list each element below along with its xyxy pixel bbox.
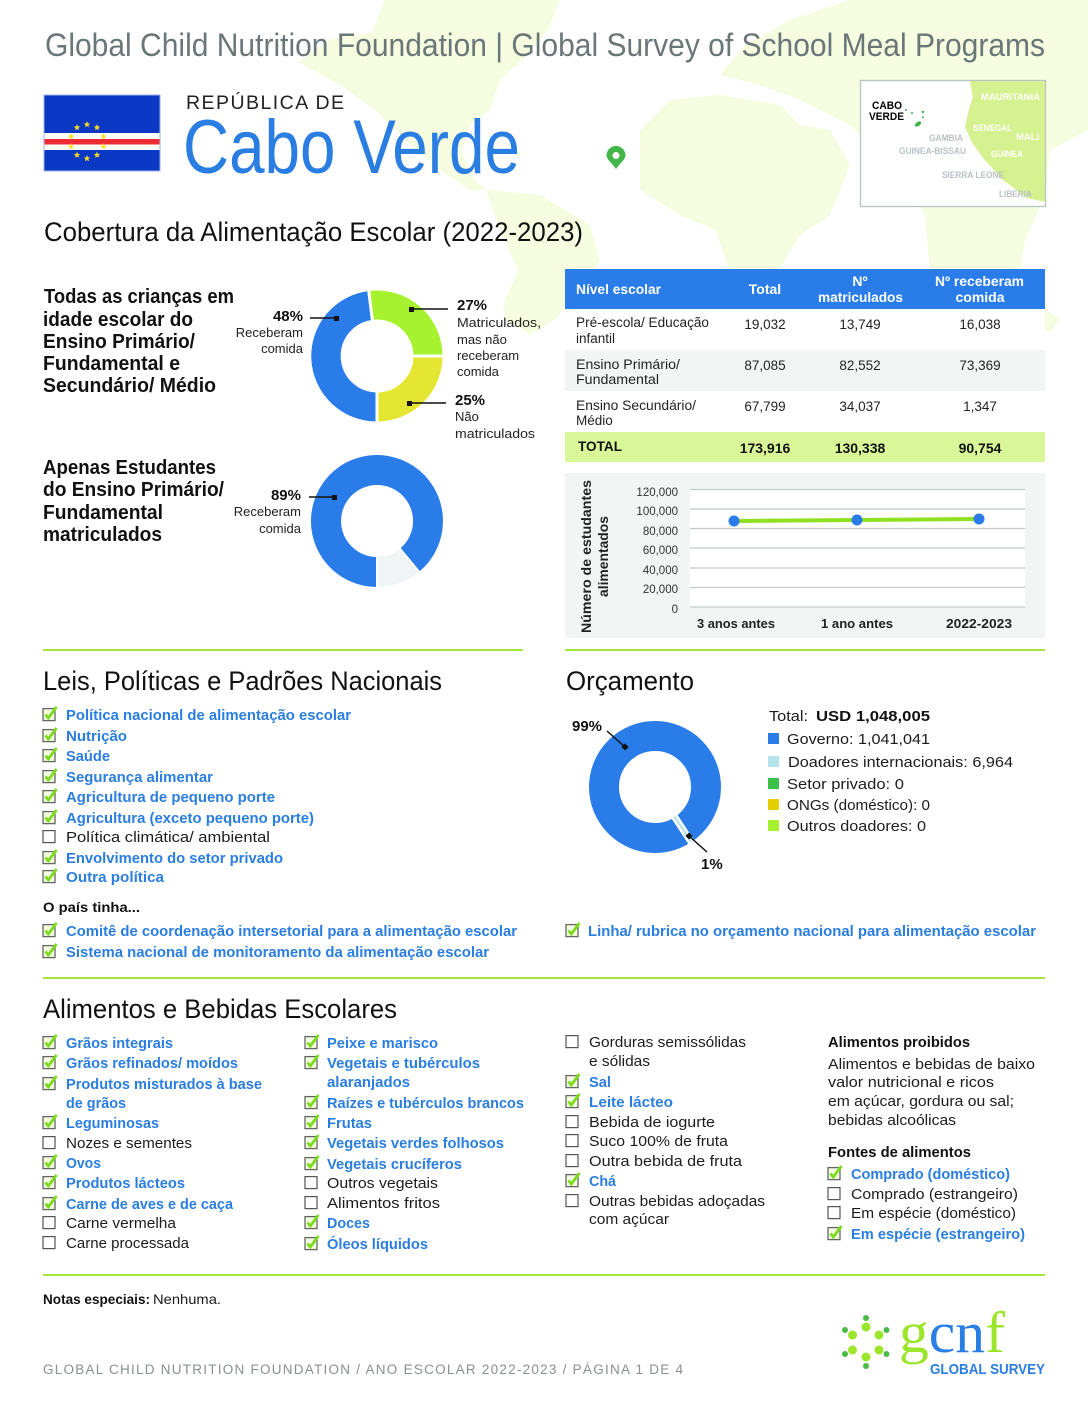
table header: Nível escolar — [576, 281, 662, 297]
item: climate policy: Política climática/ ambiental — [66, 830, 270, 846]
inset map: VERDE — [869, 111, 904, 123]
item: Peixe e marisco — [327, 1036, 438, 1052]
item: Vegetais e tubérculos — [327, 1056, 480, 1072]
callout: 89% received food — [234, 487, 337, 536]
legend: other donors: Outros doadores: 0 — [787, 818, 926, 835]
item: com açúcar — [589, 1212, 669, 1228]
item: nutrition — [43, 728, 127, 745]
item: Sal — [589, 1075, 611, 1091]
donut chart: all children — [310, 289, 444, 423]
item: health — [43, 748, 110, 765]
row: secondary: Médio — [576, 413, 613, 428]
legend: private sector: Setor privado: 0 — [787, 776, 904, 793]
footer: GLOBAL CHILD NUTRITION FOUNDATION / ANO ESCOLAR 2022-2023 / PÁGINA 1 DE 4 — [43, 1362, 683, 1377]
callout: 89% received food: Receberam — [234, 504, 301, 519]
line chart: students fed: 60,000 — [643, 545, 678, 557]
item: de grãos — [66, 1096, 126, 1112]
inset map: SIERRA LEONE — [942, 170, 1004, 180]
checklist: foods column 3 — [566, 1035, 765, 1228]
item: Gorduras semissólidas — [589, 1035, 746, 1051]
inset map: GAMBIA — [929, 133, 963, 143]
item: Comprado (doméstico) — [851, 1167, 1010, 1183]
logo: gcnf global survey: GLOBAL SURVEY — [930, 1361, 1045, 1378]
legend: budget sources — [768, 731, 1013, 835]
item: coordination committee: Comitê de coordenação intersetorial para a alimentação escolar — [66, 924, 517, 940]
item: Outra bebida de fruta — [589, 1154, 743, 1170]
row: preschool: Pré-escola/ Educação — [576, 315, 709, 330]
logo: gcnf global survey: gcnf — [899, 1300, 1006, 1365]
item: Carne processada — [66, 1236, 190, 1252]
budget total — [769, 708, 930, 725]
callout: 89% received food: 89% — [271, 487, 301, 504]
row: primary: 73,369 — [959, 358, 1001, 373]
item: Óleos líquidos — [327, 1235, 428, 1253]
callout: 27% enrolled not fed — [409, 297, 541, 379]
row: preschool: infantil — [576, 331, 615, 346]
item: Ovos — [66, 1156, 101, 1172]
heading: enrolled primary students only — [43, 457, 224, 546]
line chart: students fed: 120,000 — [636, 487, 678, 499]
callout: 25% not enrolled: Não — [455, 409, 479, 424]
page title: Global Child Nutrition Foundation | Global Survey of School Meal Programs — [45, 27, 1045, 63]
item — [566, 1194, 765, 1228]
heading: all school-age children: idade escolar do — [43, 309, 193, 331]
line chart: students fed: 1 ano antes — [821, 616, 893, 631]
donut chart: enrolled primary students — [310, 454, 444, 588]
item: other policy: Outra política — [66, 870, 165, 886]
country heading: Cabo Verde — [183, 105, 520, 190]
inset map: GUINEA — [991, 149, 1023, 159]
text block: prohibited foods — [828, 1035, 1035, 1129]
item — [43, 1076, 262, 1112]
text block: prohibited foods: Alimentos proibidos — [828, 1035, 970, 1051]
item: Alimentos fritos — [327, 1196, 440, 1212]
inset map: SENEGAL — [973, 123, 1012, 133]
row: total: 90,754 — [959, 440, 1002, 456]
inset map — [860, 80, 1046, 206]
text block: prohibited foods: em açúcar, gordura ou sal; — [828, 1094, 1014, 1110]
text block: prohibited foods: bebidas alcoólicas — [828, 1113, 956, 1129]
table header: Nº receberam — [935, 273, 1024, 289]
callout: 89% received food: comida — [259, 521, 302, 536]
callout: 27% enrolled not fed: 27% — [457, 297, 487, 314]
legend: international donors: Doadores internacionais: 6,964 — [788, 754, 1013, 771]
heading: all school-age children: Fundamental e — [43, 353, 180, 375]
row: preschool — [565, 309, 1045, 350]
checklist: food sources: Fontes de alimentos — [828, 1145, 971, 1161]
item: Grãos refinados/ moídos — [66, 1056, 238, 1072]
row: primary: Fundamental — [576, 372, 659, 387]
item: Vegetais verdes folhosos — [327, 1136, 504, 1152]
special notes: Nenhuma. — [153, 1291, 221, 1307]
item: monitoring system: Sistema nacional de monitoramento da alimentação escolar — [66, 945, 489, 961]
table header: matriculados — [818, 289, 903, 305]
line chart: students fed: 20,000 — [643, 584, 678, 596]
callout: 27% enrolled not fed: receberam — [457, 348, 519, 363]
section heading: budget: Orçamento — [566, 666, 694, 696]
checklist: policies — [43, 707, 351, 886]
section heading: laws and policies: Leis, Políticas e Padrões Nacionais — [43, 666, 442, 696]
table header: Total — [749, 281, 781, 297]
row: total — [565, 432, 1045, 462]
row: preschool: 16,038 — [959, 317, 1001, 332]
item — [305, 1215, 370, 1232]
row: total: 130,338 — [835, 440, 886, 456]
row: total: TOTAL — [578, 439, 622, 454]
heading: enrolled primary students only: Fundamental — [43, 502, 163, 524]
callout: 48% received food: Receberam — [236, 325, 303, 340]
item: alaranjados — [327, 1075, 410, 1091]
checklist: the country had — [43, 923, 517, 961]
row: primary — [565, 350, 1045, 391]
item: other agriculture: Agricultura (exceto pequeno porte) — [66, 811, 314, 827]
item: Bebida de iogurte — [589, 1115, 715, 1131]
item: national budget line: Linha/ rubrica no orçamento nacional para alimentação escolar — [588, 924, 1036, 940]
line chart: students fed: 100,000 — [636, 506, 678, 518]
donut chart: budget — [604, 736, 706, 844]
item: Suco 100% de fruta — [589, 1134, 729, 1150]
checklist: foods column 1 — [43, 1035, 262, 1252]
text block: prohibited foods: Alimentos e bebidas de baixo — [828, 1057, 1035, 1073]
item — [305, 1115, 372, 1132]
legend: NGOs: ONGs (doméstico): 0 — [787, 797, 930, 814]
budget total: USD 1,048,005 — [816, 708, 930, 725]
item: Vegetais crucíferos — [327, 1157, 462, 1173]
item — [43, 1155, 101, 1172]
table header: comida — [955, 289, 1005, 305]
row: secondary: Ensino Secundário/ — [576, 398, 696, 413]
heading: enrolled primary students only: Apenas Estudantes — [43, 457, 216, 479]
row: primary: Ensino Primário/ — [576, 357, 680, 372]
item: school feeding policy: Política nacional de alimentação escolar — [66, 708, 351, 724]
row: secondary — [565, 391, 1045, 432]
line chart: students fed: 0 — [672, 604, 678, 616]
subheading: the country had: O país tinha... — [43, 899, 140, 915]
callout: 48% received food: 48% — [273, 308, 303, 325]
item: Em espécie (doméstico) — [851, 1206, 1016, 1222]
item: Outras bebidas adoçadas — [589, 1194, 765, 1210]
special notes: Notas especiais: — [43, 1291, 150, 1307]
callout: 1%: 1% — [701, 856, 723, 873]
callout: 27% enrolled not fed: mas não — [457, 332, 507, 347]
item: Outros vegetais — [327, 1176, 438, 1192]
item: Nozes e sementes — [66, 1136, 192, 1152]
legend: government: Governo: 1,041,041 — [787, 731, 930, 748]
line chart: students fed: alimentados — [595, 516, 611, 597]
item: smallholder agriculture: Agricultura de pequeno porte — [66, 790, 275, 806]
callout: 99%: 99% — [572, 718, 602, 735]
item: food security: Segurança alimentar — [66, 770, 213, 786]
row: primary: 87,085 — [744, 358, 786, 373]
row: preschool: 19,032 — [744, 317, 786, 332]
heading: all school-age children: Todas as crianças em — [44, 286, 234, 308]
inset map: MALI — [1016, 132, 1039, 142]
callout: 27% enrolled not fed: comida — [457, 364, 500, 379]
item — [566, 1035, 746, 1070]
country heading: REPÚBLICA DE — [186, 91, 344, 114]
line chart: students fed: 2022-2023 — [946, 616, 1012, 631]
item: Doces — [327, 1216, 370, 1232]
item — [566, 1173, 617, 1190]
table: enrolment by school level — [565, 269, 1045, 462]
line chart: students fed — [565, 473, 1045, 638]
budget total: Total: — [769, 708, 808, 725]
inset map: LIBERIA — [999, 189, 1032, 199]
callout: 1% — [685, 832, 723, 873]
section heading: coverage: Cobertura da Alimentação Escolar (2022-2023) — [44, 217, 583, 247]
heading: all school-age children: Secundário/ Médio — [43, 375, 216, 397]
row: secondary: 34,037 — [839, 399, 881, 414]
item: Comprado (estrangeiro) — [851, 1187, 1018, 1203]
item: Leguminosas — [66, 1116, 159, 1132]
background world map — [298, 0, 1088, 335]
row: secondary: 67,799 — [744, 399, 786, 414]
callout: 99% — [572, 718, 629, 751]
heading: enrolled primary students only: do Ensino Primário/ — [43, 479, 224, 501]
item: Em espécie (estrangeiro) — [851, 1227, 1025, 1243]
heading: all school-age children: Ensino Primário/ — [43, 331, 195, 353]
callout: 48% received food: comida — [261, 341, 304, 356]
item: Produtos misturados à base — [66, 1077, 262, 1093]
line chart: students fed: 3 anos antes — [697, 616, 775, 631]
item: e sólidas — [589, 1054, 650, 1070]
callout: 25% not enrolled: matriculados — [455, 426, 536, 441]
inset map: CABO — [872, 100, 902, 112]
item: Raízes e tubérculos brancos — [327, 1096, 524, 1112]
inset map: MAURITANIA — [981, 92, 1041, 102]
row: primary: 82,552 — [839, 358, 881, 373]
table header — [565, 269, 1045, 309]
item: Chá — [589, 1174, 617, 1190]
special notes — [43, 1291, 221, 1307]
row: total: 173,916 — [740, 440, 791, 456]
callout: 48% received food — [236, 308, 339, 356]
item — [305, 1055, 480, 1091]
callout: 25% not enrolled: 25% — [455, 392, 485, 409]
line chart: students fed: Número de estudantes — [578, 480, 594, 633]
line chart: students fed: 40,000 — [643, 565, 678, 577]
item: Grãos integrais — [66, 1036, 173, 1052]
inset map: GUINEA-BISSAU — [899, 146, 966, 156]
line chart: students fed: 80,000 — [643, 526, 678, 538]
item: Carne de aves e de caça — [66, 1197, 234, 1213]
icon: flag of Cabo Verde — [44, 95, 160, 171]
item: private sector: Envolvimento do setor privado — [66, 851, 283, 867]
item: health: Saúde — [66, 749, 110, 765]
section heading: school food and beverages: Alimentos e Bebidas Escolares — [43, 994, 397, 1024]
heading: enrolled primary students only: matriculados — [43, 524, 162, 546]
logo: gcnf global survey — [842, 1300, 1045, 1378]
item: Carne vermelha — [66, 1216, 177, 1232]
table header: Nº — [852, 273, 868, 289]
row: secondary: 1,347 — [963, 399, 997, 414]
heading: all school-age children — [43, 286, 234, 397]
item — [566, 1074, 611, 1091]
icon: location pin — [606, 146, 626, 169]
callout: 25% not enrolled — [407, 392, 536, 441]
row: preschool: 13,749 — [839, 317, 881, 332]
item: nutrition: Nutrição — [66, 729, 127, 745]
callout: 27% enrolled not fed: Matriculados, — [457, 315, 541, 330]
item: Produtos lácteos — [66, 1176, 185, 1192]
checklist: food sources — [828, 1145, 1025, 1243]
text block: prohibited foods: valor nutricional e ricos — [828, 1075, 994, 1091]
item: Frutas — [327, 1116, 372, 1132]
item: Leite lácteo — [589, 1095, 673, 1111]
checklist: foods column 2 — [305, 1035, 524, 1253]
